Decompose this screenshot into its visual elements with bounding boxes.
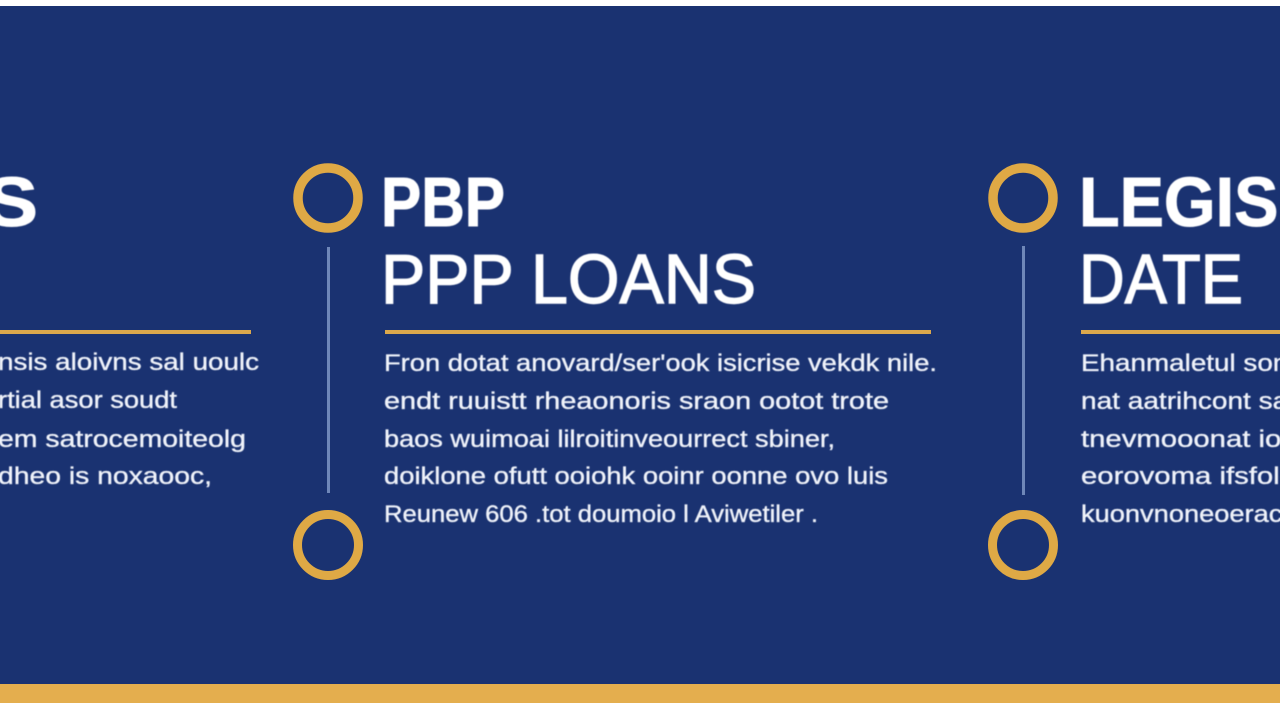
heading: PPP LOANS: PPP LOANS <box>381 240 756 318</box>
heading: PBP: PBP <box>381 163 505 241</box>
text block: left body: rtial asor soudt <box>0 387 177 414</box>
icon: middle bottom ring <box>298 514 358 576</box>
icon: right top ring <box>993 168 1053 228</box>
divider: middle gold rule <box>385 330 931 334</box>
divider: left gold rule <box>0 330 251 334</box>
timeline: right connector <box>1022 246 1025 495</box>
text block: right body: Ehanmaletul som <box>1081 350 1280 377</box>
text block: middle body: baos wuimoai lilroitinveourrect sbiner, <box>384 426 835 453</box>
text block: right body: eorovoma ifsfole <box>1081 463 1280 490</box>
text block: middle body: doiklone ofutt ooiohk ooinr oonne ovo luis <box>384 463 888 490</box>
text block: middle body: Fron dotat anovard/ser'ook isicrise vekdk nile. <box>384 350 937 377</box>
divider: right gold rule <box>1081 330 1280 334</box>
column: legislative date (cropped) <box>992 163 1280 576</box>
icon: right bottom ring <box>992 514 1054 576</box>
text block: left body: em satrocemoiteolg <box>0 426 246 453</box>
text block: right body: kuonvnoneoerack <box>1081 501 1280 528</box>
text block: middle body <box>384 350 937 528</box>
text block: left body <box>0 349 259 490</box>
column: left (cropped) <box>0 163 259 490</box>
icon: middle top ring <box>298 168 358 228</box>
heading: DATE: DATE <box>1079 240 1243 318</box>
text block: middle body: Reunew 606 .tot doumoio l Aviwetiler . <box>384 501 818 528</box>
timeline: middle connector <box>327 247 330 493</box>
column: PPP loans <box>298 163 937 576</box>
text block: right body: nat aatrihcont sat <box>1081 388 1280 415</box>
text block: middle body: endt ruuistt rheaonoris sraon ootot trote <box>384 388 889 415</box>
text block: right body: tnevmooonat ioc <box>1081 426 1280 453</box>
text block: left body: dheo is noxaooc, <box>0 463 212 490</box>
text block: left body: nsis aloivns sal uoulc <box>0 349 259 376</box>
bottom gold band <box>0 684 1280 703</box>
text block: right body <box>1081 350 1280 528</box>
